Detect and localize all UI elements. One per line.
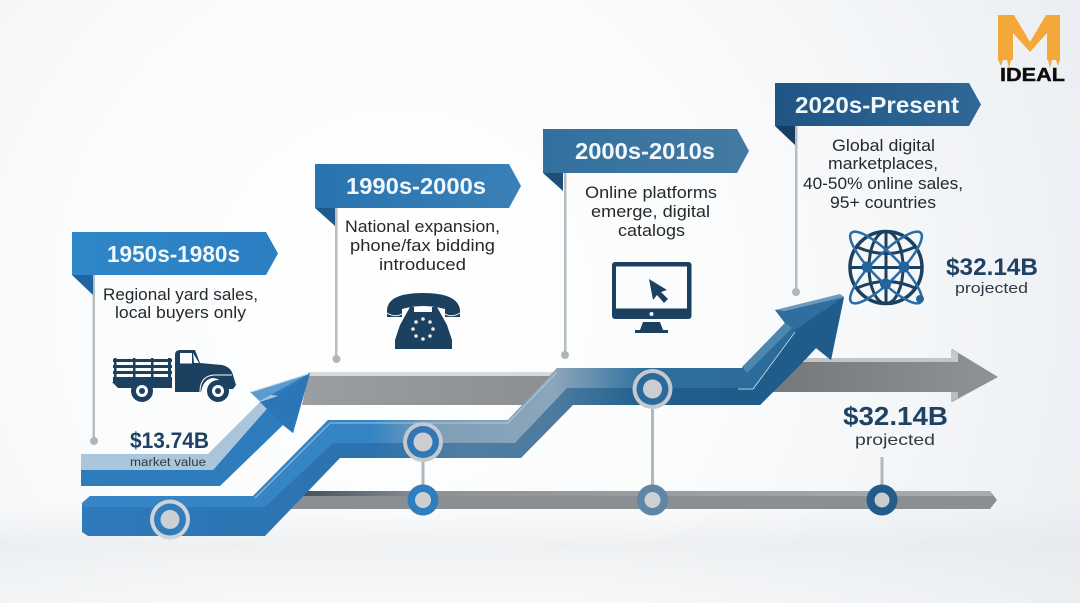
logo [998,15,1065,85]
pole 3 [561,173,569,359]
icon: globe network [842,224,930,311]
banner 3 [543,129,749,191]
node: bar dot 3 [866,484,898,516]
banner 1: 1950s-1980s [107,241,240,267]
value: projected under arrow: projected [855,432,935,449]
description 3 [585,184,717,240]
banner 3: 2000s-2010s [575,138,715,164]
description 4: 95+ countries [830,194,936,212]
banner 4: 2020s-Present [795,92,959,118]
description 4 [803,137,963,212]
description 1: Regional yard sales, [103,286,258,304]
description 2: National expansion, [345,218,500,236]
node: bar dot 2 [637,484,668,516]
value 4 [946,254,1038,297]
node: 1950s ring [150,500,190,540]
icon: telephone [387,293,460,349]
banner 2 [315,164,521,226]
lower main blue arrow band [82,294,844,536]
pole 1 [90,275,98,445]
upper light blue arrow [81,373,310,486]
value: projected under arrow [843,401,948,449]
value 1 [130,428,209,469]
node: 1990s ring [403,422,443,462]
value 1: $13.74B [130,428,209,453]
banner 2: 1990s-2000s [346,173,486,199]
icon: monitor [612,262,692,333]
description 1: local buyers only [115,304,247,322]
description 2: introduced [379,256,466,274]
description 1 [103,286,258,322]
value 4: projected [955,280,1028,297]
description 4: Global digital [832,137,935,155]
upper grey bar [302,372,565,405]
description 3: emerge, digital [591,203,710,221]
bottom grey timeline bar [290,491,997,509]
grey arrow to the right [770,349,998,402]
banner 4 [775,83,981,145]
node: bar dot 1 [408,484,438,516]
timeline connector poles [422,406,884,490]
icon: truck [112,350,236,402]
pole 4 [792,126,800,296]
description 3: catalogs [618,222,685,240]
logo: IDEAL [1000,65,1065,85]
description 2 [345,218,500,274]
value: projected under arrow: $32.14B [843,401,948,431]
panel: 2000s-2010s [543,129,749,359]
panel: 2020s-Present [775,83,1038,311]
panel: 1990s-2000s [315,164,521,363]
description 4: 40-50% online sales, [803,175,963,193]
node: 2000s ring [632,369,672,409]
value 4: $32.14B [946,254,1038,281]
pole 2 [332,208,340,363]
description 2: phone/fax bidding [350,237,495,255]
floor shadow [0,505,1080,603]
value 1: market value [130,457,206,469]
panel: 1950s-1980s [72,232,278,469]
description 4: marketplaces, [828,155,938,173]
banner 1 [72,232,278,295]
description 3: Online platforms [585,184,717,202]
